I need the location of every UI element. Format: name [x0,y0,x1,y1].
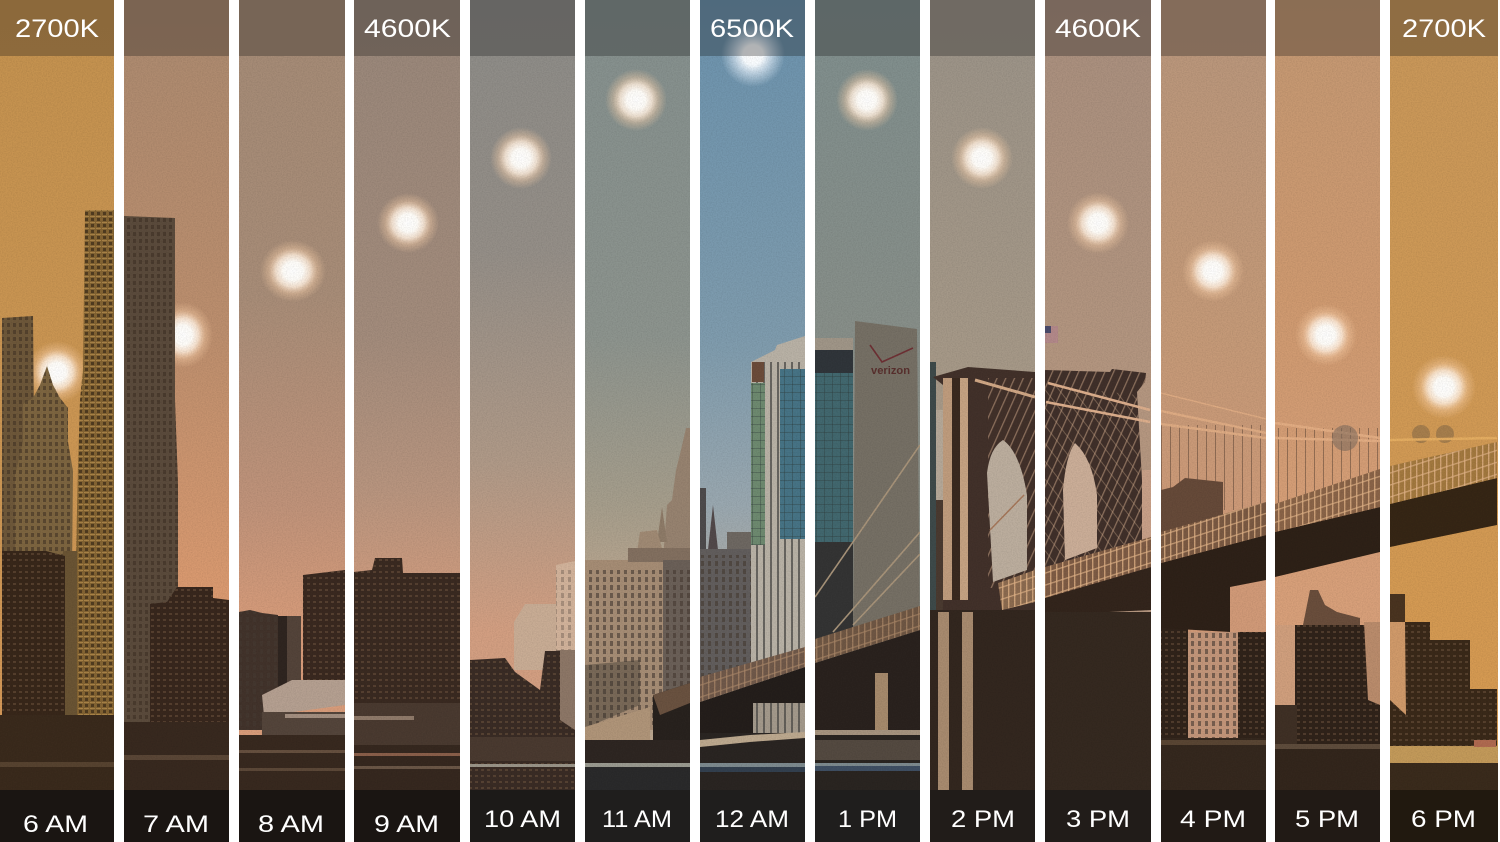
panel: 9 AM [354,0,460,842]
bridge cables [1275,423,1380,441]
bottom bar [930,790,1035,842]
bridge deck [700,647,805,800]
time label: 5 PM [1295,806,1359,833]
bridge cable [1390,438,1497,440]
bridge deck [1275,469,1380,577]
time label: 10 AM [484,806,561,833]
sky [354,0,460,573]
time label: 11 AM [602,806,672,833]
time label: 9 AM [374,811,439,838]
municipal building [700,488,753,689]
bridge tower [1045,369,1151,600]
bottom bar [1045,790,1151,842]
sun [175,305,210,365]
top bar [0,0,114,56]
sky [1390,0,1498,842]
bridge cables [815,445,920,632]
sky [0,0,114,715]
glass tower [751,336,805,722]
bottom bar [470,790,575,842]
panel: 3 PM [1045,0,1151,842]
sun [379,195,437,251]
municipal building [585,428,690,730]
top bar [1275,0,1380,56]
time label: 12 AM [715,806,789,833]
bottom bar [585,790,690,842]
sky [1161,0,1266,842]
sky [700,0,805,842]
top bar [585,0,690,56]
top bar [1161,0,1266,56]
bottom bar [239,790,345,842]
sun [34,343,83,400]
skyline [124,216,229,800]
bottom bar [354,790,460,842]
flag [1045,326,1058,343]
bridge cables [1046,383,1150,422]
top bar [815,0,920,56]
panel: 5 PM [1275,0,1380,842]
sun [836,69,898,131]
top bar [124,0,229,56]
bridge approach [585,683,690,800]
housing blocks [1275,590,1380,800]
panel: 12 AM [700,0,805,842]
panel: 4 PM [1161,0,1266,842]
time label: 4 PM [1180,806,1246,833]
sun [605,69,667,131]
sun [262,242,324,300]
bridge cables [1161,393,1266,438]
sky [239,0,345,735]
top bar [700,0,805,56]
colour temperature label: 4600K [1055,15,1141,43]
bottom bar [1390,790,1498,842]
sun [1182,240,1244,302]
bridge deck [815,606,920,800]
top bar [930,0,1035,56]
time label: 8 AM [258,811,324,838]
bottom bar [124,790,229,842]
colour temperature label: 2700K [1402,15,1486,43]
sky [470,0,575,730]
colour temperature label: 4600K [364,15,451,43]
bridge deck [1390,442,1497,547]
time label: 1 PM [838,806,897,833]
sun [490,127,552,189]
sky [585,0,690,740]
bottom bar [0,790,114,842]
panel: 6 AM [0,0,114,842]
time label: 3 PM [1066,806,1130,833]
sun [721,23,785,87]
skyline [239,570,345,800]
office tower with verizon sign [815,321,920,648]
top bar [470,0,575,56]
top bar [239,0,345,56]
time label: 2 PM [951,806,1015,833]
panel: 2 PM [930,0,1035,842]
bottom bar [700,790,805,842]
time label: 6 PM [1411,806,1476,833]
time label: 7 AM [143,811,209,838]
sun [1067,192,1129,254]
colour temperature label: 2700K [15,15,99,43]
suspenders [1161,425,1266,510]
cable wheel [1332,425,1358,451]
colour temperature label: 6500K [710,15,794,43]
sky [1045,0,1151,842]
top bar [1045,0,1151,56]
distant building [1161,478,1223,535]
sky [930,0,1035,842]
top bar [354,0,460,56]
panel: 10 AM [470,0,575,842]
bottom bar [815,790,920,842]
panel: 11 AM [585,0,690,842]
bridge tower [930,362,1035,800]
bottom bar [1161,790,1266,842]
sun [951,127,1013,189]
panel: 6 PM [1390,0,1498,842]
panel: 7 AM [124,0,229,842]
housing blocks [1390,594,1498,800]
skyline [470,561,575,800]
sun [1412,355,1476,419]
sky [815,0,920,842]
bridge deck [1161,502,1266,632]
sun [1295,304,1357,366]
cable wheels [1412,425,1454,443]
sky [1275,0,1380,842]
bridge deck [1045,537,1151,800]
sky [124,0,229,600]
panel: 1 PM [815,0,920,842]
panel: 8 AM [239,0,345,842]
office tower with verizon sign: verizon [871,365,910,377]
suspenders [1275,428,1380,503]
housing blocks [1161,618,1266,800]
skyline [0,210,114,800]
top bar [1390,0,1498,56]
time label: 6 AM [23,811,88,838]
bottom bar [1275,790,1380,842]
skyline [354,558,460,800]
